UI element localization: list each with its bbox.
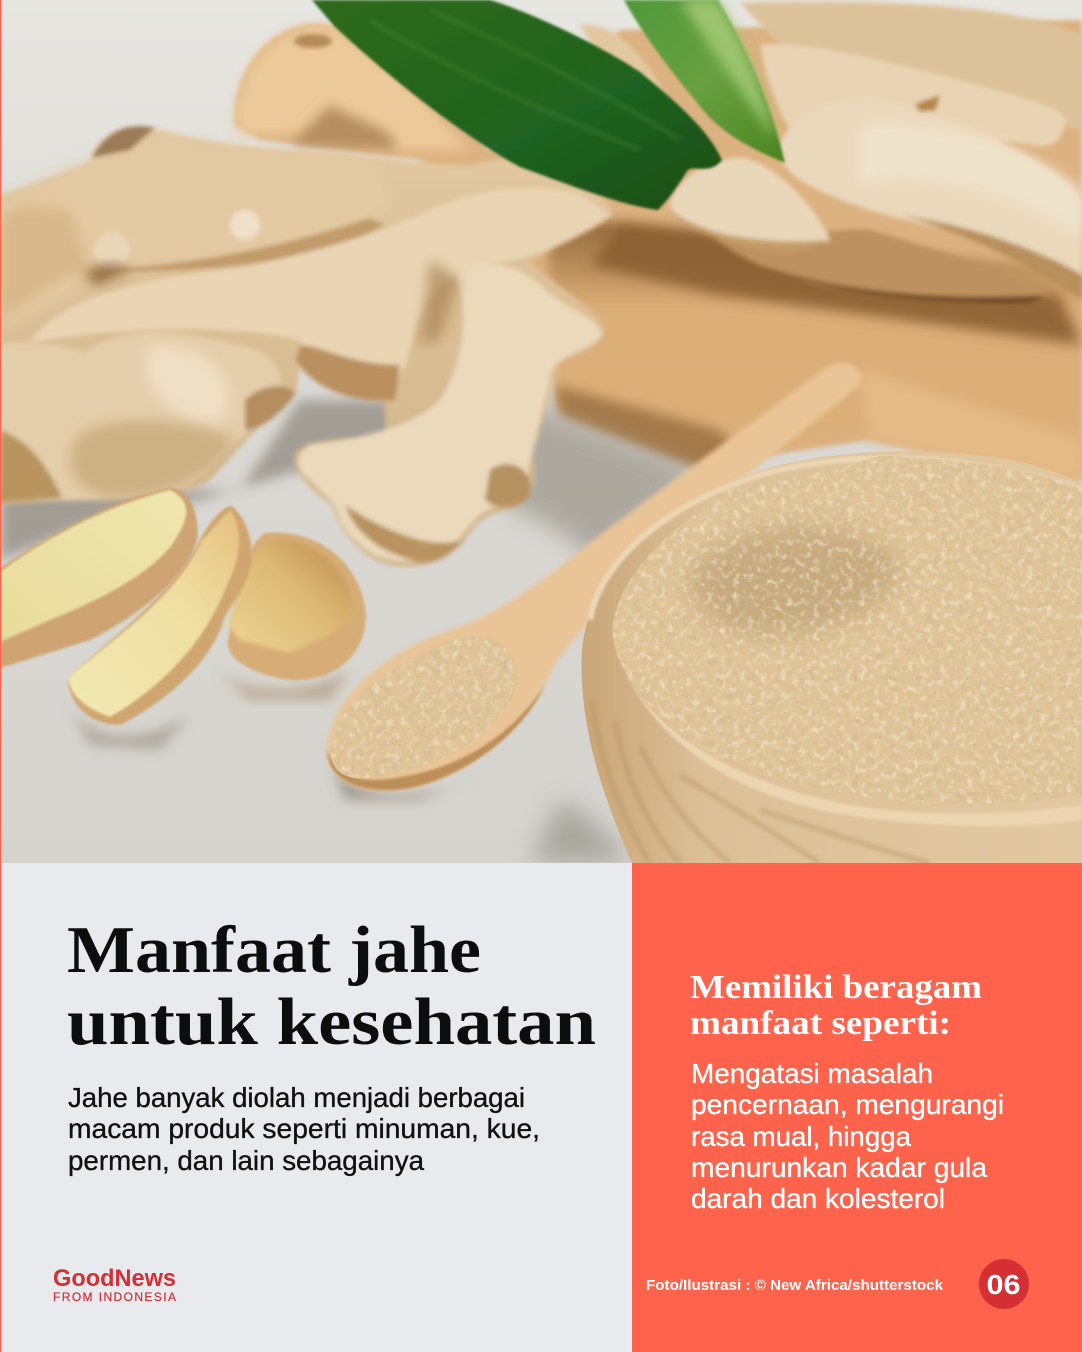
description text: [68, 1082, 540, 1176]
title: untuk kesehatan: [67, 985, 596, 1059]
finger: main: [780, 122, 1082, 277]
ginger slices: [0, 488, 366, 725]
ginger: right branch and lower bulb: [299, 264, 602, 562]
ginger: highlights: [230, 210, 260, 240]
title: [67, 913, 596, 1059]
ginger: upper branch: [19, 156, 144, 316]
benefits heading: [690, 969, 982, 1042]
upper right ginger: [580, 2, 1082, 345]
ginger: left lump: [0, 333, 281, 501]
benefits heading: manfaat seperti:: [690, 1005, 951, 1042]
wooden bowl: [582, 451, 1082, 863]
wooden spoon: [327, 363, 862, 790]
leaf: back: [624, 0, 785, 163]
title: Manfaat jahe: [67, 913, 481, 987]
benefits text: Mengatasi masalah: [691, 1058, 933, 1089]
green pandan leaves: [312, 0, 785, 210]
benefits text: darah dan kolesterol: [691, 1183, 945, 1214]
slice 1: [0, 488, 198, 668]
under-finger shadow: [590, 225, 1082, 345]
description text: permen, dan lain sebagainya: [68, 1145, 424, 1176]
photo credit: Foto/Ilustrasi : © New Africa/shutterstock: [646, 1277, 944, 1294]
wooden cutting board: [235, 20, 1082, 482]
page number badge: 06: [986, 1269, 1020, 1300]
photo: ginger, powder and wooden bowl: [0, 0, 1082, 863]
slice 2: [68, 506, 252, 725]
slice 3: [228, 533, 366, 680]
table background: [0, 0, 1082, 863]
ginger: middle branch: [30, 188, 610, 396]
logo: GoodNews from Indonesia: [53, 1265, 176, 1304]
page number badge: [979, 1259, 1029, 1309]
logo: GoodNews from Indonesia: GoodNews: [53, 1265, 176, 1292]
spoon powder: [331, 636, 518, 778]
left edge line: [0, 0, 1, 1352]
finger: small: [670, 158, 830, 249]
bowl of ginger powder: [605, 450, 1082, 810]
benefits text: menurunkan kadar gula: [691, 1152, 987, 1183]
main ginger root: [0, 126, 612, 566]
finger: top: [760, 44, 1066, 146]
description text: macam produk seperti minuman, kue,: [68, 1113, 540, 1144]
left panel background: [0, 863, 632, 1352]
shadow under ginger and board: [0, 400, 700, 863]
benefits heading: Memiliki beragam: [690, 969, 982, 1006]
right coral panel background: [632, 863, 1082, 1352]
benefits text: rasa mual, hingga: [691, 1121, 911, 1152]
description text: Jahe banyak diolah menjadi berbagai: [68, 1082, 525, 1113]
logo: GoodNews from Indonesia: FROM INDONESIA: [53, 1290, 176, 1304]
benefits text: pencernaan, mengurangi: [691, 1089, 1004, 1120]
leaf: front: [312, 0, 722, 210]
benefits text: [691, 1058, 1004, 1214]
